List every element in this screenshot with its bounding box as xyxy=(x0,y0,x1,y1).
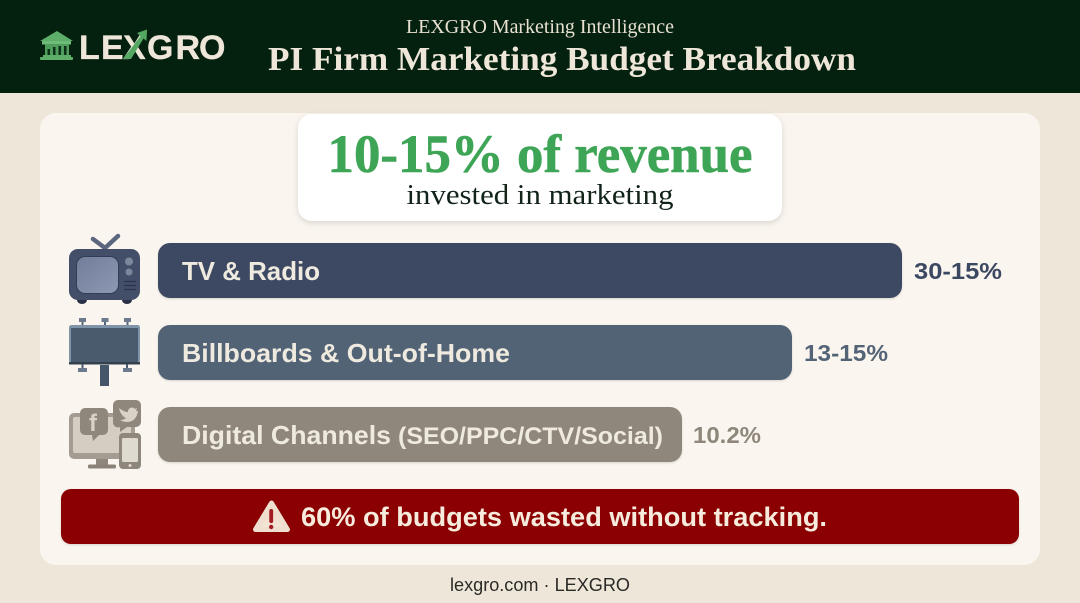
icon: digital channels xyxy=(69,400,141,469)
icon: billboard xyxy=(69,318,140,386)
alert banner: 60% of budgets wasted without tracking. xyxy=(301,502,827,532)
panel: budget breakdown xyxy=(40,113,1040,565)
icon: warning triangle xyxy=(256,503,288,530)
bar: Digital Channels: (SEO/PPC/CTV/Social) xyxy=(398,423,663,450)
bar: TV & Radio xyxy=(158,243,902,298)
footer: lexgro.com · LEXGRO xyxy=(450,575,630,595)
bar: Digital Channels xyxy=(158,407,682,462)
bar: Billboards & Out-of-Home xyxy=(158,325,792,380)
value: Digital Channels: 10.2% xyxy=(693,422,761,448)
icon: growth arrow xyxy=(123,30,147,59)
icon: digital channels: f xyxy=(89,410,98,437)
eyebrow: LEXGRO Marketing Intelligence xyxy=(406,16,674,38)
callout: 10-15% of revenue xyxy=(298,114,782,221)
value: TV & Radio: 30-15% xyxy=(914,258,1002,284)
title: PI Firm Marketing Budget Breakdown xyxy=(268,41,856,78)
bar: Digital Channels: Digital Channels xyxy=(182,420,391,450)
alert banner xyxy=(61,489,1019,544)
callout: 10-15% of revenue: 10-15% of revenue xyxy=(328,124,752,184)
header band xyxy=(0,0,1080,93)
callout: 10-15% of revenue: invested in marketing xyxy=(406,179,674,211)
value: Billboards & Out-of-Home: 13-15% xyxy=(804,340,888,366)
logo: LEXGRO xyxy=(40,29,225,67)
wordmark: LEXGRO xyxy=(79,29,225,67)
bar: TV & Radio: TV & Radio xyxy=(182,256,320,286)
bar: Billboards & Out-of-Home: Billboards & Out-of-Home xyxy=(182,338,510,368)
icon: courthouse xyxy=(40,31,73,60)
icon: TV xyxy=(69,236,140,304)
